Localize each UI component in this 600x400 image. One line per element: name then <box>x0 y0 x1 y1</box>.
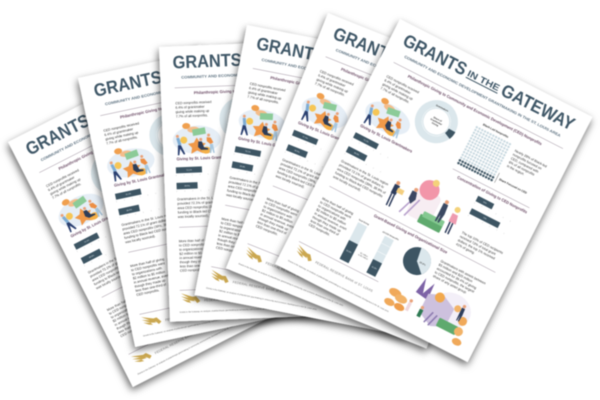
text: grantmaker paragraph: funding to Black-led CED nonprofits <box>93 259 143 286</box>
heading: grantmakers: Giving by St. Louis Grantmakers <box>297 120 354 146</box>
paper <box>78 33 346 347</box>
organization name: FEDERAL RESERVE BANK of ST. LOUIS <box>265 261 326 288</box>
text: grant size paragraph: to CED nonprofits went <box>319 200 352 219</box>
text: grant size paragraph: to CED nonprofits went <box>220 221 255 231</box>
text: grantmaker paragraph: provided 72.1% of grant dollars to <box>177 200 227 206</box>
text: grant size paragraph: CED nonprofits. <box>216 246 240 254</box>
title: GRANTS <box>400 30 470 79</box>
text: grant size paragraph: in annual revenue, even <box>133 273 169 285</box>
title: GRANTS <box>330 23 402 68</box>
text: CED share: giving while making up <box>176 109 209 114</box>
text: Black-led paragraph: Nearly 28% of Black-led <box>514 149 548 169</box>
heading: grant-based giving: Grant-Based Giving and Organizational Size <box>373 213 449 255</box>
bar chart: 38.9% <box>353 152 359 157</box>
text: concentration paragraph: The top 10% of CED recipients <box>461 231 504 255</box>
heading: grantmakers: Giving by St. Louis Grantmakers <box>238 135 296 152</box>
subtitle: COMMUNITY AND ECONOMIC DEVELOPMENT GRANTMAKING IN THE ST. LOUIS AREA <box>335 48 499 117</box>
bar chart: 38.9% <box>89 255 95 259</box>
text: grant size paragraph: CED nonprofits. <box>120 324 143 338</box>
text: pie paragraph: $5 million and $25 million <box>438 263 473 283</box>
heading: philanthropic giving: Philanthropic Giving to Community and Economic Development (CED) Nonprofits <box>58 98 194 171</box>
bar chart: 38.9% <box>184 185 190 188</box>
footnote: Grants in the Gateway: an analysis of philanthropic grantmaking to community and economic development in the St. Louis area. <box>238 262 344 307</box>
text: grant size paragraph: less than one-third of <box>310 219 340 237</box>
organization name: FEDERAL RESERVE BANK of ST. LOUIS <box>315 260 373 293</box>
bar chart: 72.1% <box>125 193 132 196</box>
text: CED share: giving while making up <box>316 77 349 94</box>
bar chart: 72.1% <box>186 169 192 172</box>
text: Black-led paragraph: nonprofits focused on <box>512 153 542 171</box>
logo <box>244 247 265 264</box>
text: grant size paragraph: to organizations with <box>220 225 250 235</box>
footnote: Grants in the Gateway: an analysis of philanthropic grantmaking to community and economic development in the St. Louis area. <box>137 322 239 376</box>
paper <box>226 13 529 349</box>
text: grantmaker paragraph: Grantmakers in the St. Louis region <box>177 195 230 201</box>
heading: grantmakers: Giving by St. Louis Grantmakers <box>114 171 172 188</box>
text: grant size paragraph: in annual revenue, even <box>314 211 347 231</box>
text: grant size paragraph: More than half of giving <box>179 238 214 243</box>
text: grant size paragraph: less than one-third of <box>216 241 248 251</box>
text: grantmaker paragraph: funding to Black-led CED nonprofits <box>178 208 231 215</box>
text: grantmaker paragraph: provided 72.1% of grant dollars to <box>122 217 172 231</box>
text: grant size paragraph: More than half of giving <box>130 257 165 268</box>
text: CED share: 7.7% of all nonprofits. <box>247 95 279 105</box>
text: grantmaker paragraph: provided 72.1% of grant dollars to <box>89 252 136 279</box>
footnote: Grants in the Gateway: an analysis of philanthropic grantmaking to community and economic development in the St. Louis area. <box>287 259 390 313</box>
text: CED share: 6.4% of grantmaker <box>104 127 134 137</box>
bar chart: 72.1% <box>84 239 90 244</box>
illustration: people and piggy bank <box>359 92 417 142</box>
organization name: FEDERAL RESERVE BANK of ST. LOUIS <box>165 305 228 322</box>
subtitle: COMMUNITY AND ECONOMIC DEVELOPMENT GRANTMAKING IN THE ST. LOUIS AREA <box>404 55 562 138</box>
text: CED share: CED nonprofits received <box>319 69 354 86</box>
text: grant size paragraph: less than one-third of <box>118 317 147 335</box>
bar chart <box>285 130 331 167</box>
text: grantmaker paragraph: area CED nonprofits (39%, 38.9% of <box>177 204 232 210</box>
text: grant size paragraph: to organizations with <box>179 247 210 252</box>
text: grant size paragraph: in annual revenue, even <box>260 212 295 229</box>
donut chart <box>150 114 192 156</box>
stacked bars: to $5 million <box>357 253 368 261</box>
text: grantmaker paragraph: funding to Black-led CED nonprofits <box>277 170 328 193</box>
footnote: Grants in the Gateway: an analysis of philanthropic grantmaking to community and economic development in the St. Louis area. <box>143 311 254 338</box>
text: CED share: 7.7% of all nonprofits. <box>51 182 82 200</box>
logo <box>131 348 153 366</box>
paper <box>195 25 459 336</box>
text: grant size paragraph: More than half of giving <box>106 293 139 312</box>
sheet 2 <box>78 33 346 347</box>
text: grant size paragraph: to CED nonprofits went <box>179 242 213 248</box>
text: grantmaker paragraph: funding to Black-led CED nonprofits <box>334 171 384 199</box>
text: CED share: 6.4% of grantmaker <box>175 105 206 110</box>
text: CED share: 6.4% of grantmaker <box>384 78 412 95</box>
donut chart <box>222 100 260 137</box>
text: grantmaker paragraph: was locally sourced). <box>226 193 257 203</box>
text: CED share: 6.4% of grantmaker <box>249 86 279 96</box>
text: grant size paragraph: though they made up <box>217 237 249 247</box>
title <box>400 30 578 134</box>
stacked bars: $2 million <box>360 252 368 258</box>
text: grant size paragraph: though they made up <box>180 259 211 264</box>
donut chart: Grantmaker <box>430 118 443 126</box>
text: CED share: giving while making up <box>382 82 414 101</box>
text: grantmaker paragraph: was locally sourced). <box>125 234 156 244</box>
text: grant size paragraph: though they made up <box>258 216 289 232</box>
illustration: people and piggy bank <box>52 184 109 235</box>
illustration: people and piggy bank <box>172 122 221 156</box>
bar chart: concentration: 41% <box>482 201 487 205</box>
text: grantmaker paragraph: area CED nonprofits (39%, 38.9% of <box>336 167 386 195</box>
bar chart <box>231 146 275 178</box>
bar chart: 38.9% <box>126 209 132 212</box>
bar chart <box>176 166 217 192</box>
stacked bars <box>339 218 400 279</box>
text: concentration paragraph: dollars; the top 1% received <box>457 238 496 261</box>
bar chart <box>345 132 391 172</box>
text: grant size paragraph: though they made up <box>116 313 146 331</box>
bar chart <box>74 226 120 266</box>
text: CED share: CED nonprofits received <box>103 121 140 133</box>
text: grant size paragraph: $2 million to $5 million <box>112 305 143 323</box>
subtitle: COMMUNITY AND ECONOMIC DEVELOPMENT GRANTMAKING IN THE ST. LOUIS AREA <box>261 58 434 95</box>
donut chart <box>88 149 137 197</box>
text: grantmaker paragraph: provided 72.1% of grant dollars to <box>338 163 385 189</box>
dot grid: Black-led nonprofits: Share Focused on CED <box>498 177 528 195</box>
text: grant size paragraph: $2 million to $5 million <box>179 251 212 256</box>
text: grant size paragraph: in annual revenue, even <box>114 307 148 327</box>
text: CED share: CED nonprofits received <box>175 100 212 105</box>
pie chart: 39.4% <box>419 261 427 267</box>
text: grant size paragraph: CED nonprofits. <box>180 268 204 273</box>
text: CED share: CED nonprofits received <box>249 82 286 93</box>
text: grant size paragraph: to organizations with <box>263 204 293 220</box>
donut chart: Share of <box>433 117 442 123</box>
text: grantmaker paragraph: Grantmakers in the St. Louis region <box>340 159 389 186</box>
text: CED share: 7.7% of all nonprofits. <box>106 135 138 146</box>
sheet 5 <box>226 13 529 349</box>
bar chart: 72.1% <box>302 136 308 140</box>
text: grantmaker paragraph: Grantmakers in the St. Louis region <box>121 212 174 227</box>
text: grant size paragraph: $2 million to $5 million <box>219 229 252 239</box>
subtitle: COMMUNITY AND ECONOMIC DEVELOPMENT GRANTMAKING IN THE ST. LOUIS AREA <box>181 69 357 80</box>
footnote: Grants in the Gateway: an analysis of philanthropic grantmaking to community and economic development in the St. Louis area. <box>180 306 293 314</box>
title: GRANTS <box>255 33 326 66</box>
heading: philanthropic giving: Philanthropic Giving to Community and Economic Development (CED) Nonprofits <box>270 75 419 109</box>
sheet 4 <box>195 25 459 336</box>
illustration: people and piggy bank <box>236 102 289 143</box>
paper <box>159 38 386 322</box>
text: grant size paragraph: less than one-third of <box>180 263 211 269</box>
text: grant size paragraph: More than half of giving <box>321 196 354 216</box>
paper <box>275 19 592 362</box>
heading: grantmakers: Giving by St. Louis Grantmakers <box>359 123 414 154</box>
footnote: Grants in the Gateway: an analysis of philanthropic grantmaking to community and economic development in the St. Louis area. <box>206 287 318 311</box>
text: CED share: CED nonprofits received <box>386 74 420 94</box>
text: grant size paragraph: in annual revenue, even <box>179 255 215 260</box>
donut chart: Giving <box>431 122 439 128</box>
text: CED share: CED nonprofits received <box>45 168 80 188</box>
text: grantmaker paragraph: funding to Black-led CED nonprofits <box>227 188 280 203</box>
illustration: people and piggy bank <box>104 141 157 183</box>
bar chart <box>115 186 159 218</box>
text: CED share: 6.4% of grantmaker <box>47 175 76 192</box>
text: grantmaker paragraph: area CED nonprofits (39%, 38.9% of <box>123 221 177 236</box>
dot grid: Black-led nonprofits <box>456 120 547 198</box>
text: grantmaker paragraph: Grantmakers in the St. Louis region <box>229 176 282 190</box>
bar chart: 38.9% <box>239 166 245 169</box>
stacked bars: 50.8% <box>346 250 352 254</box>
text: grant size paragraph: $2 million to $5 million <box>132 270 166 281</box>
text: grant size paragraph: though they made up <box>312 215 342 233</box>
donut chart <box>412 97 461 146</box>
text: grant size paragraph: though they made up <box>134 278 166 289</box>
text: grant size paragraph: $2 million to $5 million <box>316 208 347 226</box>
text: CED share: giving while making up <box>49 177 81 196</box>
bar chart: 72.1% <box>363 139 369 144</box>
text: grantmaker paragraph: was locally sourced). <box>275 174 305 189</box>
bar chart: 72.1% <box>245 151 251 154</box>
text: CED share: 7.7% of all nonprofits. <box>380 86 410 104</box>
text: Black-led paragraph: 6% of all nonprofits <box>508 160 536 177</box>
text: grant size paragraph: to organizations with <box>132 266 162 276</box>
text: CED share: giving while making up <box>248 90 282 101</box>
organization name: FEDERAL RESERVE BANK of ST. LOUIS <box>232 280 296 296</box>
text: grant size paragraph: to organizations with <box>110 302 139 320</box>
stacked bars: All CED Nonprofits <box>382 230 400 242</box>
sheet 6 (front) <box>275 19 592 362</box>
text: grantmaker paragraph: area CED nonprofits (39%, 38.9% of <box>228 184 281 198</box>
subtitle: COMMUNITY AND ECONOMIC DEVELOPMENT GRANTMAKING IN THE ST. LOUIS AREA <box>105 66 277 106</box>
text: Black-led paragraph: CED, compared with <box>510 156 539 174</box>
text: grantmaker paragraph: Grantmakers in the St. Louis region <box>87 247 136 275</box>
logo <box>294 245 315 263</box>
text: CED share: 7.7% of all nonprofits. <box>314 82 346 97</box>
text: concentration paragraph: received 72% of total grant <box>459 234 496 256</box>
text: pie paragraph: share of any asset group. <box>432 274 468 295</box>
title: GRANTS <box>172 50 242 72</box>
heading: grantmakers: Giving by St. Louis Grantmakers <box>176 154 235 161</box>
title: GRANTS <box>92 67 164 101</box>
text: grantmaker paragraph: was locally sourced). <box>332 175 362 192</box>
sheet 3 <box>159 38 386 322</box>
illustration: coins, donation box and cash <box>381 266 481 347</box>
illustration: ladder, balloon and cash <box>384 164 470 239</box>
title: GATEWAY <box>498 80 578 134</box>
text: CED share: 7.7% of all nonprofits. <box>176 113 208 119</box>
sheet 1 (back) <box>8 44 325 387</box>
text: grantmaker paragraph: was locally sourced). <box>178 214 209 219</box>
paper <box>8 44 325 387</box>
text: pie paragraph: accounted for 39.4% of giving <box>436 267 477 290</box>
text: Black-led paragraph: in the region. <box>506 164 525 176</box>
text: grant size paragraph: to CED nonprofits went <box>108 297 141 316</box>
heading: grantmakers: Giving by St. Louis Grantmakers <box>70 207 124 239</box>
text: grantmaker paragraph: provided 72.1% of grant dollars to <box>280 162 328 184</box>
text: grant size paragraph: CED nonprofits. <box>255 224 279 236</box>
text: grantmaker paragraph: area CED nonprofits (39%, 38.9% of <box>278 166 330 190</box>
text: grant size paragraph: $2 million to $5 million <box>261 208 293 224</box>
heading: concentration of giving: Concentration of Giving to CED Nonprofits <box>456 175 529 215</box>
text: grantmaker paragraph: provided 72.1% of grant dollars to <box>228 180 278 193</box>
logo <box>210 270 230 284</box>
text: CED share: giving while making up <box>105 130 139 141</box>
dot grid: Black-led nonprofits: Black-Led Nonprofits <box>482 122 510 139</box>
text: grant size paragraph: CED nonprofits. <box>136 288 160 297</box>
donut chart: Grantmakers <box>435 104 449 113</box>
pie chart <box>398 242 436 280</box>
text: grant size paragraph: less than one-third of <box>135 282 167 293</box>
bar chart: concentration <box>468 196 514 234</box>
heading: philanthropic giving: Philanthropic Giving to Community and Economic Development (CED) Nonprofits <box>407 74 544 147</box>
stacked bars: Total Giving <box>358 218 370 226</box>
text: pie paragraph: to CED nonprofits, the largest <box>434 270 475 294</box>
stacked bars: 31.6% <box>371 266 377 271</box>
text: grant size paragraph: to CED nonprofits went <box>264 201 298 217</box>
title: IN THE <box>466 68 501 93</box>
text: pie paragraph: Grantmakers with assets between <box>440 259 487 286</box>
text: CED share: 6.4% of grantmaker <box>317 73 347 88</box>
logo <box>181 293 200 304</box>
text: grant size paragraph: to organizations with <box>317 204 347 221</box>
text: grantmaker paragraph: was locally sourced). <box>95 273 125 290</box>
text: grant size paragraph: More than half of giving <box>221 217 256 227</box>
title: GRANTS <box>22 110 93 159</box>
bar chart: 38.9% <box>294 150 300 154</box>
text: grant size paragraph: to CED nonprofits went <box>131 261 165 272</box>
text: grant size paragraph: less than one-third of <box>257 220 287 235</box>
subtitle: COMMUNITY AND ECONOMIC DEVELOPMENT GRANTMAKING IN THE ST. LOUIS AREA <box>40 79 198 162</box>
text: concentration paragraph: 41% of giving. <box>455 242 476 255</box>
organization name: FEDERAL RESERVE BANK of ST. LOUIS <box>154 322 213 355</box>
organization name: FEDERAL RESERVE BANK of ST. LOUIS <box>204 296 268 302</box>
illustration: people and piggy bank <box>297 88 353 136</box>
logo <box>141 313 162 327</box>
heading: philanthropic giving: Philanthropic Giving to Community and Economic Development (CED) Nonprofits <box>194 84 345 95</box>
text: grantmaker paragraph: Grantmakers in the St. Louis region <box>282 158 332 181</box>
text: grant size paragraph: in annual revenue, even <box>218 233 254 244</box>
heading: philanthropic giving: Philanthropic Giving to Community and Economic Development (CED) Nonprofits <box>340 67 482 127</box>
text: grant size paragraph: CED nonprofits. <box>308 223 331 237</box>
heading: philanthropic giving: Philanthropic Giving to Community and Economic Development (CED) Nonprofits <box>120 83 268 120</box>
text: grantmaker paragraph: funding to Black-led CED nonprofits <box>124 225 177 240</box>
bar chart: concentration: 72% <box>482 217 487 221</box>
text: grant size paragraph: More than half of giving <box>266 197 300 213</box>
text: grantmaker paragraph: area CED nonprofits (39%, 38.9% of <box>91 254 141 282</box>
